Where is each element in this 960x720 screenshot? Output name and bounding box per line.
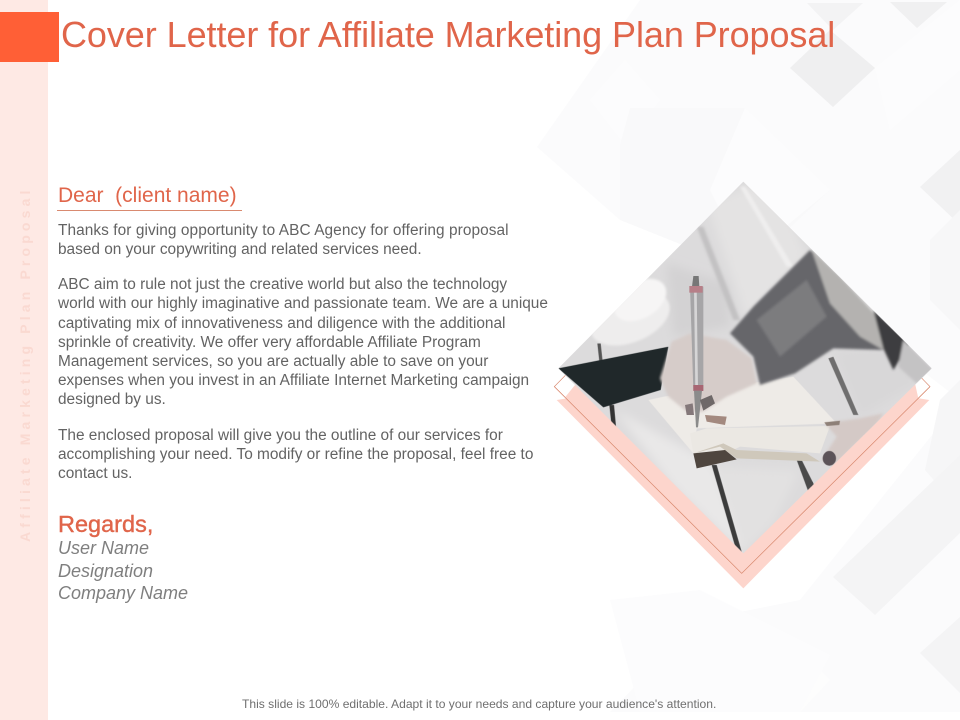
heading underline bbox=[57, 210, 242, 211]
paragraph 3: contact us. bbox=[58, 465, 132, 482]
paragraph 2: Management services, so you are actually able to save on your bbox=[58, 353, 488, 370]
open book bbox=[690, 426, 830, 453]
paragraph 2 bbox=[58, 276, 548, 408]
hand bbox=[660, 333, 757, 412]
phone bbox=[558, 347, 668, 407]
letter body text bbox=[58, 222, 548, 482]
sleeve bbox=[730, 250, 933, 385]
paragraph 2: expenses when you invest in an Affiliate Internet Marketing campaign bbox=[58, 372, 529, 389]
title: Cover Letter for Affiliate Marketing Plan Proposal bbox=[61, 14, 835, 55]
regards heading: Regards, bbox=[58, 511, 153, 537]
fingernails bbox=[700, 395, 715, 411]
signature block: Designation bbox=[58, 561, 153, 581]
paragraph 3: accomplishing your need. To modify or refine the proposal, feel free to bbox=[58, 446, 533, 463]
pink backing diamond bbox=[557, 370, 929, 588]
paragraph 1: Thanks for giving opportunity to ABC Agency for offering proposal bbox=[58, 222, 509, 239]
title accent block bbox=[0, 12, 59, 62]
photo bbox=[558, 182, 932, 554]
right fingers bbox=[822, 413, 883, 467]
paragraph 3: The enclosed proposal will give you the outline of our services for bbox=[58, 427, 503, 444]
diamond photo with pink backing bbox=[554, 182, 932, 588]
salutation heading: Dear (client name) bbox=[58, 184, 237, 207]
paragraph 2: designed by us. bbox=[58, 391, 166, 408]
plank gaps bbox=[697, 227, 740, 320]
paragraph 1 bbox=[58, 222, 509, 258]
pen bbox=[690, 287, 703, 390]
signature block bbox=[58, 538, 188, 603]
sidebar vertical label: Affiliate Marketing Plan Proposal bbox=[17, 186, 33, 542]
signature block: Company Name bbox=[58, 583, 188, 603]
notebook page bbox=[648, 377, 837, 453]
outline diamond bbox=[554, 193, 930, 573]
footer note: This slide is 100% editable. Adapt it to your needs and capture your audience's attention. bbox=[242, 697, 716, 711]
scarf bbox=[812, 250, 883, 350]
paragraph 3 bbox=[58, 427, 533, 482]
paragraph 2: world with our highly imaginative and passionate team. We are a unique bbox=[58, 295, 548, 312]
signature block: User Name bbox=[58, 538, 149, 558]
paragraph 1: based on your copywriting and related services need. bbox=[58, 241, 422, 258]
saucer bbox=[592, 299, 670, 346]
paragraph 2: ABC aim to rule not just the creative world but also the technology bbox=[58, 276, 507, 293]
paragraph 2: captivating mix of innovativeness and diligence with the additional bbox=[58, 315, 505, 332]
paragraph 2: sprinkle of creativity. We offer very affordable Affiliate Program bbox=[58, 334, 481, 351]
left sidebar bbox=[0, 0, 48, 720]
